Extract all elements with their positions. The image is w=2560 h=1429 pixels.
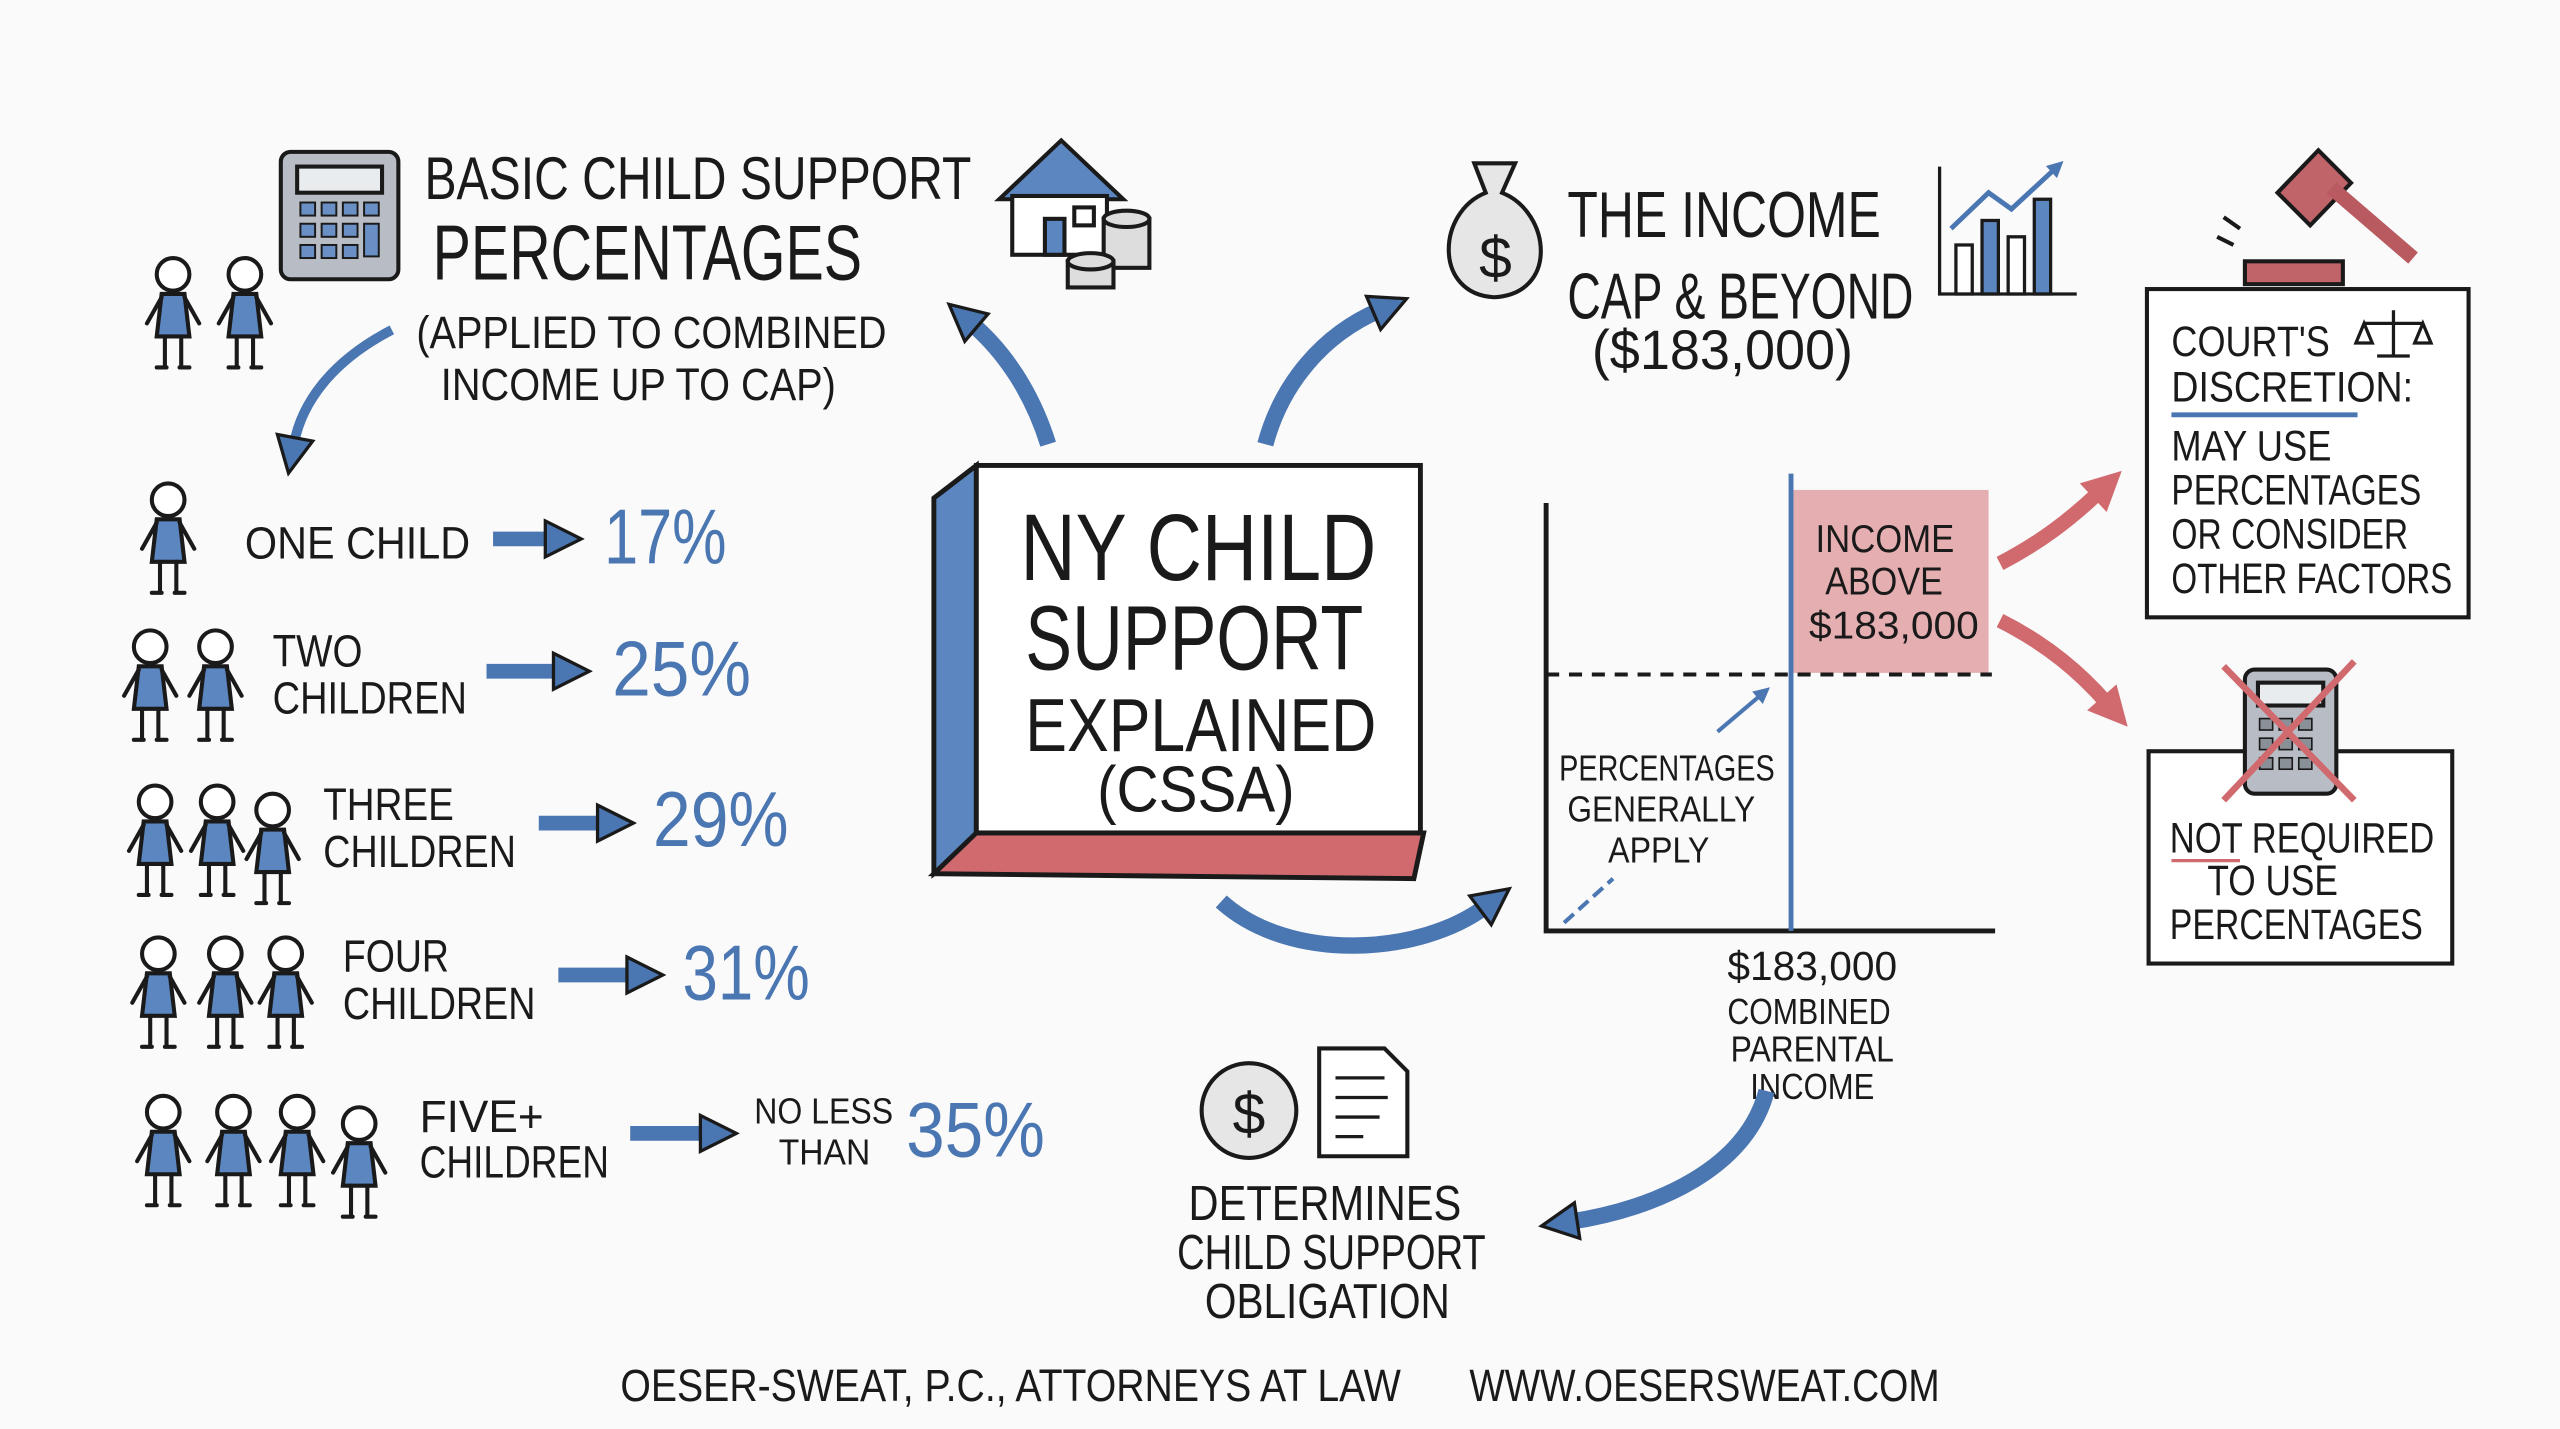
row: two children: CHILDREN xyxy=(273,673,467,724)
heading: the income cap & beyond: ($183,000) xyxy=(1592,319,1853,381)
panel: not required: PERCENTAGES xyxy=(2170,901,2423,948)
icon: crossed calculator xyxy=(2224,661,2354,800)
row: two children xyxy=(124,625,751,740)
central box: NY child support explained: NY CHILD xyxy=(1020,495,1376,601)
icon: money bag: $ xyxy=(1479,226,1512,291)
icon: coin and document xyxy=(1202,1048,1407,1158)
row: four children xyxy=(132,928,810,1047)
icon: kids pair xyxy=(147,258,271,367)
panel: court's discretion: MAY USE xyxy=(2171,423,2331,470)
icon: gavel xyxy=(2217,150,2413,284)
row: three children xyxy=(129,775,789,903)
row: five+ children: FIVE+ xyxy=(420,1091,544,1142)
row: one child xyxy=(142,483,727,593)
panel: court's discretion: DISCRETION: xyxy=(2171,364,2413,411)
chart: income cap: ABOVE xyxy=(1825,560,1943,603)
arrow: red to not required xyxy=(2000,621,2106,702)
text: determines child support obligation: OBLIGATION xyxy=(1205,1275,1450,1329)
row: one child: ONE CHILD xyxy=(245,518,470,569)
label: $183,000 combined parental income xyxy=(1727,943,1897,1107)
panel: not required: NOT REQUIRED xyxy=(2170,814,2434,862)
arrow: up-left xyxy=(971,323,1048,444)
heading: basic child support percentages: BASIC CHILD SUPPORT xyxy=(424,144,971,212)
chart: income cap: $183,000 xyxy=(1809,605,1979,648)
row: three children: 29% xyxy=(653,775,789,863)
heading: basic child support percentages: (APPLIED TO COMBINED xyxy=(416,307,887,358)
panel: court's discretion: OTHER FACTORS xyxy=(2171,555,2452,602)
chart: income cap: INCOME xyxy=(1816,518,1954,561)
row: four children: FOUR xyxy=(343,931,449,982)
heading: the income cap & beyond xyxy=(1567,178,1913,381)
icon: house and coins xyxy=(999,140,1149,287)
label: $183,000 combined parental income: COMBINED xyxy=(1727,991,1891,1032)
chart: income cap xyxy=(1546,474,1995,931)
heading: the income cap & beyond: CAP & BEYOND xyxy=(1567,259,1913,332)
row: five+ children: CHILDREN xyxy=(420,1136,609,1187)
arrow: to obligation xyxy=(1571,1091,1767,1222)
heading: basic child support percentages: INCOME UP TO CAP) xyxy=(441,359,836,410)
chart: income cap: APPLY xyxy=(1608,829,1709,870)
label: $183,000 combined parental income: $183,000 xyxy=(1727,943,1897,989)
row: five+ children xyxy=(137,1085,1045,1217)
heading: the income cap & beyond: THE INCOME xyxy=(1567,178,1881,251)
chart: income cap: GENERALLY xyxy=(1567,788,1755,829)
panel: not required xyxy=(2149,661,2452,964)
central box: NY child support explained: EXPLAINED xyxy=(1025,683,1376,767)
row: one child: 17% xyxy=(604,492,727,580)
arrow: bottom to chart xyxy=(1221,901,1486,946)
text: determines child support obligation: CHILD SUPPORT xyxy=(1177,1226,1486,1280)
arrow: to rows xyxy=(294,330,392,444)
icon: scales xyxy=(2356,310,2431,356)
row: four children: 31% xyxy=(682,928,810,1016)
central box: NY child support explained: SUPPORT xyxy=(1025,588,1363,690)
central box: NY child support explained xyxy=(934,465,1424,879)
footer xyxy=(620,1360,1940,1411)
row: three children: CHILDREN xyxy=(323,826,516,877)
label: $183,000 combined parental income: INCOME xyxy=(1750,1066,1874,1107)
heading: basic child support percentages: PERCENTAGES xyxy=(433,208,862,296)
row: five+ children: NO LESS xyxy=(754,1091,893,1132)
row: four children: CHILDREN xyxy=(343,978,536,1029)
row: five+ children: 35% xyxy=(906,1085,1045,1173)
panel: not required: TO USE xyxy=(2207,857,2338,904)
panel: court's discretion: OR CONSIDER xyxy=(2171,511,2408,558)
panel: court's discretion: PERCENTAGES xyxy=(2171,467,2421,514)
arrow: up-right xyxy=(1265,310,1380,444)
row: three children: THREE xyxy=(323,779,454,830)
text: determines child support obligation xyxy=(1177,1177,1486,1329)
text: determines child support obligation: DETERMINES xyxy=(1189,1177,1461,1231)
heading: basic child support percentages xyxy=(416,144,971,410)
arrow: red to discretion xyxy=(2000,493,2098,563)
chart: income cap: PERCENTAGES xyxy=(1559,748,1775,789)
row: two children: 25% xyxy=(612,625,751,713)
row: two children: TWO xyxy=(273,625,362,676)
icon: bar chart xyxy=(1940,167,2077,294)
label: $183,000 combined parental income: PARENTAL xyxy=(1731,1029,1894,1070)
icon: calculator xyxy=(281,152,398,279)
panel: court's discretion xyxy=(2147,289,2469,617)
icon: coin and document: $ xyxy=(1233,1081,1265,1146)
central box: NY child support explained: (CSSA) xyxy=(1097,753,1295,826)
footer: OESER-SWEAT, P.C., ATTORNEYS AT LAW xyxy=(620,1360,1401,1411)
icon: money bag xyxy=(1449,163,1541,297)
panel: court's discretion: COURT'S xyxy=(2171,318,2330,365)
footer: WWW.OESERSWEAT.COM xyxy=(1469,1360,1940,1411)
row: five+ children: THAN xyxy=(779,1131,870,1172)
